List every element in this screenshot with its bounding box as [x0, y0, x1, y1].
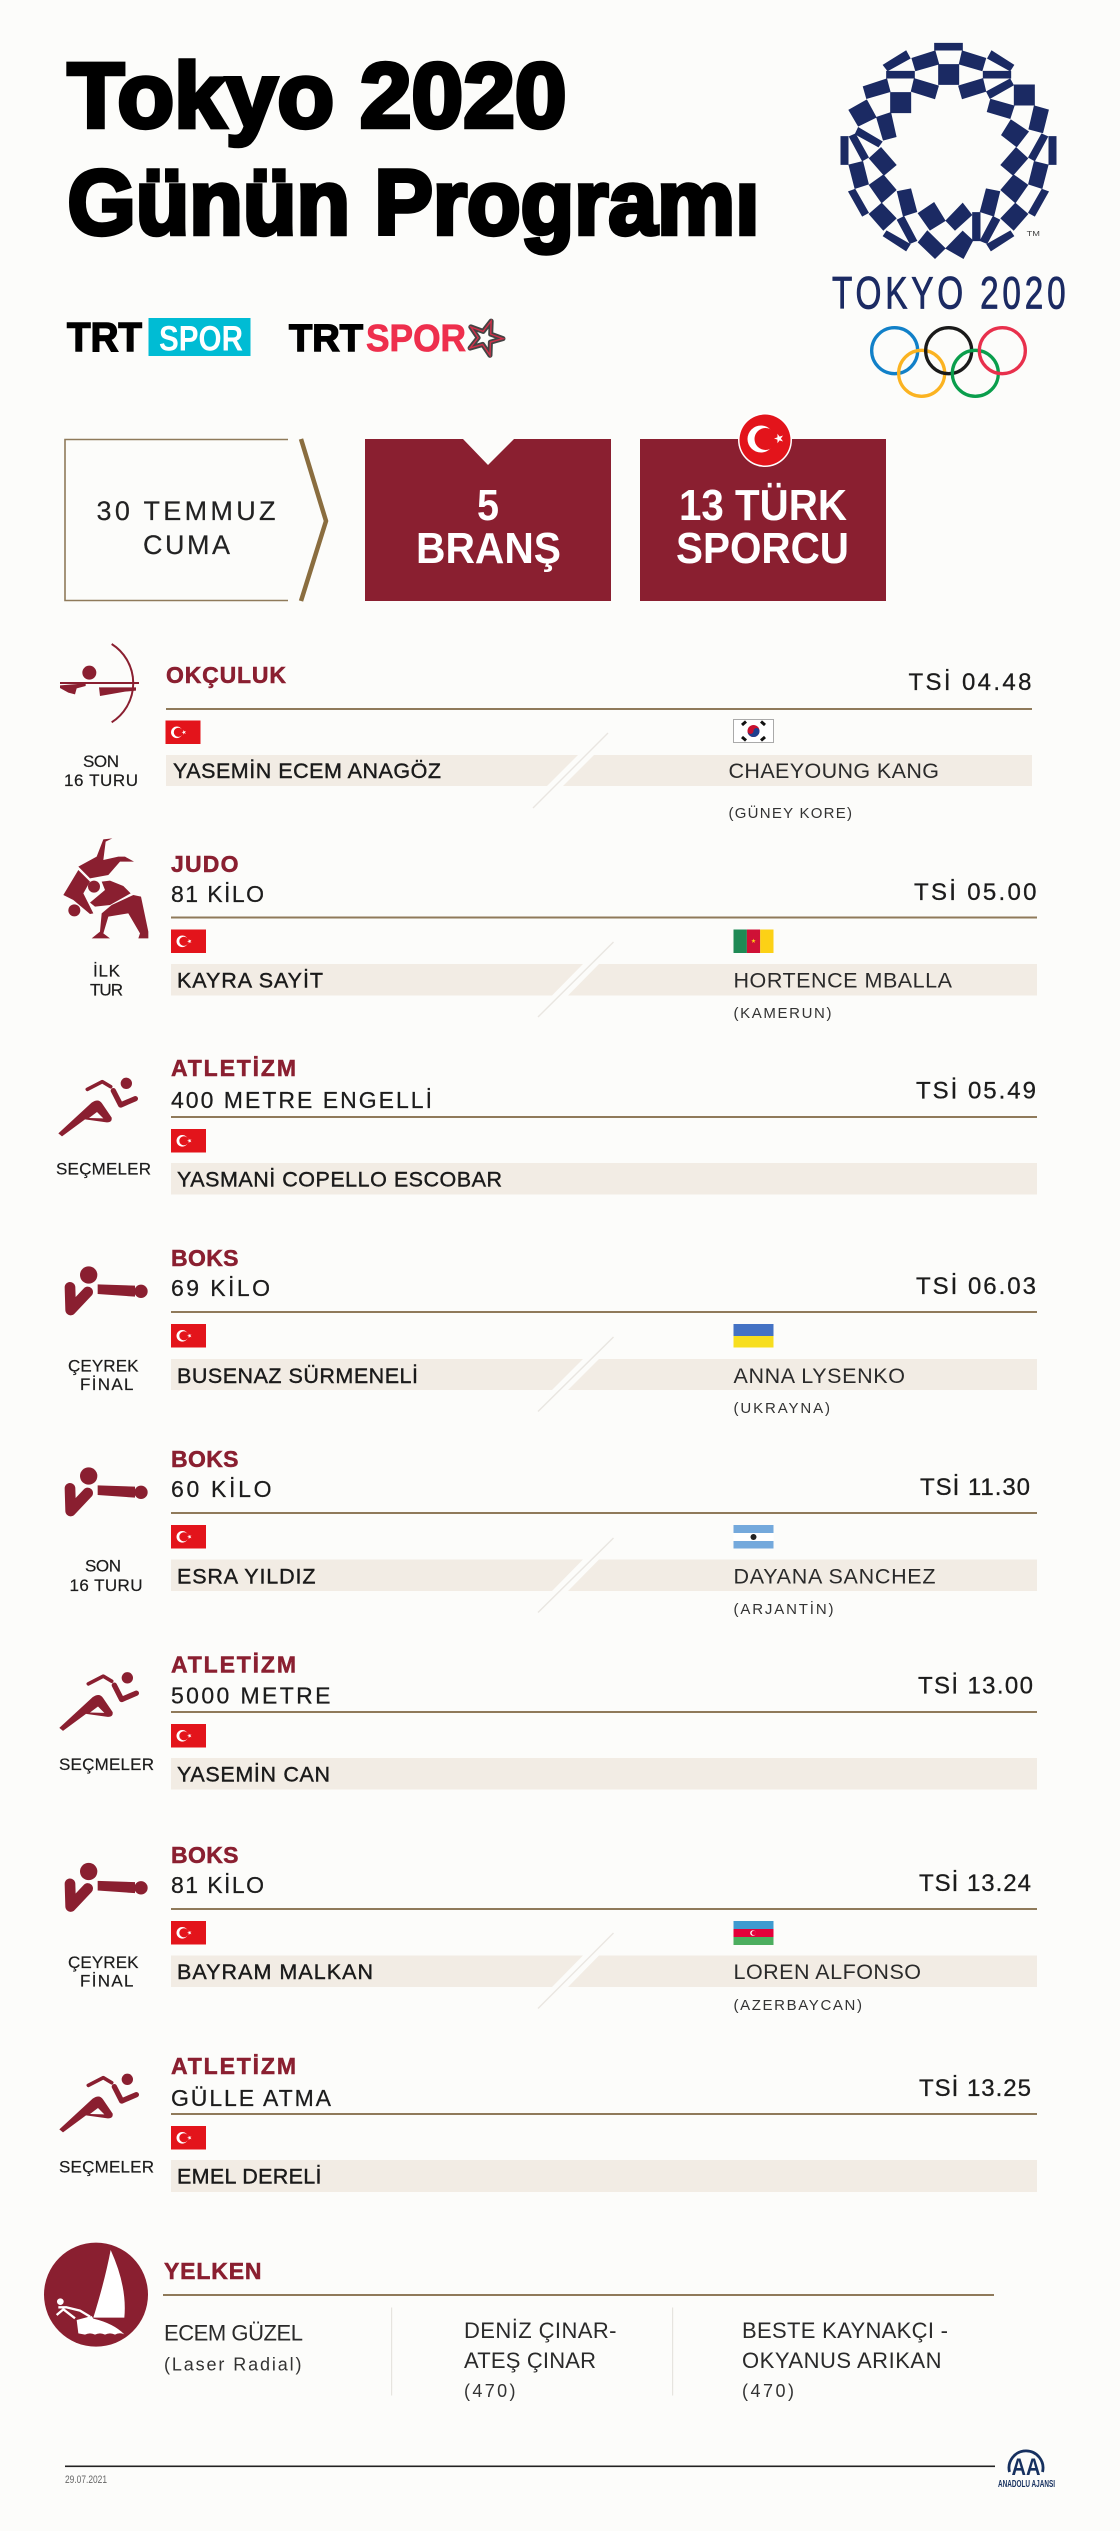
sailors: beste kaynakçı, okyanus arıkan [742, 2318, 948, 2401]
row: atletizm 400 metre engelli [56, 1055, 1037, 1194]
sailor: ecem güzel [164, 2320, 303, 2374]
row: boks 69 kilo: ANNA LYSENKO [734, 1364, 905, 1388]
icon: boxing [70, 1863, 148, 1906]
stage label: 16 TURU [64, 771, 138, 790]
sailors: deniz çınar, ateş çınar [464, 2318, 616, 2401]
date box: CUMA [143, 530, 230, 560]
row: boks 81 kilo: LOREN ALFONSO [734, 1960, 921, 1984]
stage label [68, 1356, 139, 1394]
stage label [90, 962, 123, 1000]
icon: archery [60, 644, 139, 722]
stage label [68, 1953, 139, 1990]
logo: TRT Spor Yıldız [289, 315, 507, 360]
row: atletizm 5000 metre: 5000 METRE [171, 1682, 330, 1708]
icon: argentina flag [734, 1525, 774, 1548]
row: atletizm 400 metre engelli: SEÇMELER [56, 1160, 151, 1178]
row: boks 69 kilo: (UKRAYNA) [734, 1400, 830, 1417]
row: okçuluk: TSİ 04.48 [908, 669, 1032, 696]
footer rule [65, 2466, 995, 2467]
stage label: TUR [90, 980, 123, 1000]
row: okçuluk: CHAEYOUNG KANG [728, 759, 939, 783]
row: okçuluk [60, 644, 1032, 822]
row: boks 81 kilo [68, 1842, 1037, 2014]
logo: anadolu ajansı [998, 2451, 1055, 2490]
stage label: FİNAL [80, 1375, 134, 1394]
row: atletizm 400 metre engelli: 400 METRE ENGELLİ [171, 1087, 432, 1113]
icon: running [59, 1672, 136, 1731]
row: boks 60 kilo: (ARJANTİN) [734, 1600, 834, 1618]
row: judo: TSİ 05.00 [914, 879, 1036, 906]
row: boks 60 kilo: TSİ 11.30 [920, 1474, 1030, 1501]
title: Günün Programı [68, 152, 760, 254]
row: atletizm gülle atma [59, 2053, 1037, 2192]
stat box: 5 branş: 5 [477, 481, 499, 530]
stage label: ÇEYREK [68, 1356, 139, 1376]
row: judo: (KAMERUN) [734, 1005, 832, 1022]
checkered wreath [841, 43, 1056, 258]
row: boks 81 kilo: 81 KİLO [171, 1872, 264, 1898]
icon: cameroon flag [734, 930, 774, 953]
row: okçuluk: OKÇULUK [166, 662, 286, 688]
icon: ukraine flag [734, 1324, 774, 1348]
row: boks 69 kilo: BUSENAZ SÜRMENELİ [177, 1364, 418, 1388]
section: yelken: YELKEN [164, 2258, 262, 2284]
row: okçuluk: (GÜNEY KORE) [728, 804, 852, 822]
stat box: 13 Türk sporcu: 13 TÜRK [679, 481, 847, 530]
row: atletizm gülle atma: TSİ 13.25 [919, 2075, 1031, 2102]
title [68, 45, 760, 254]
icon: azerbaijan flag [734, 1921, 774, 1945]
row: okçuluk: YASEMİN ECEM ANAGÖZ [173, 759, 441, 783]
stat box: 5 branş: BRANŞ [416, 524, 561, 573]
row: atletizm 400 metre engelli: ATLETİZM [171, 1055, 296, 1081]
icon: boxing [70, 1467, 148, 1511]
section: yelken [44, 2243, 994, 2401]
icon: korea flag [734, 720, 774, 742]
icon: judo [63, 838, 148, 938]
icon: running [58, 1078, 135, 1136]
icon: boxing [70, 1266, 148, 1310]
date box [65, 439, 326, 601]
title: Tokyo 2020 [68, 45, 566, 147]
sailors: deniz çınar, ateş çınar: ATEŞ ÇINAR [464, 2348, 596, 2373]
logo: Tokyo 2020 emblem: TM [1027, 229, 1040, 238]
emblem wordmark: TOKYO 2020 [832, 269, 1066, 319]
row: atletizm gülle atma: GÜLLE ATMA [171, 2085, 332, 2111]
row: atletizm gülle atma: EMEL DERELİ [177, 2164, 322, 2188]
row: boks 60 kilo: 60 KİLO [171, 1476, 272, 1502]
logo: TRT Spor: TRT [67, 314, 142, 360]
sailor: ecem güzel: ECEM GÜZEL [164, 2320, 303, 2346]
row: judo: HORTENCE MBALLA [734, 968, 953, 992]
stage label: FİNAL [80, 1972, 134, 1990]
stat box: 13 Türk sporcu: SPORCU [676, 524, 849, 573]
logo: TRT Spor Yıldız: TRT [289, 318, 363, 360]
row: boks 60 kilo: ESRA YILDIZ [177, 1564, 316, 1588]
row: atletizm gülle atma: SEÇMELER [59, 2158, 154, 2176]
sailors: beste kaynakçı, okyanus arıkan: (470) [742, 2381, 794, 2401]
row: boks 69 kilo: TSİ 06.03 [916, 1273, 1036, 1300]
row: boks 81 kilo: BAYRAM MALKAN [177, 1960, 373, 1984]
row: boks 81 kilo: (AZERBAYCAN) [734, 1997, 862, 2014]
row: atletizm 5000 metre: ATLETİZM [171, 1652, 296, 1678]
logo: Tokyo 2020 emblem [832, 43, 1066, 396]
row: atletizm 5000 metre: SEÇMELER [59, 1755, 154, 1774]
stage label [64, 752, 138, 790]
sailor: ecem güzel: (Laser Radial) [164, 2354, 302, 2374]
sailors: beste kaynakçı, okyanus arıkan: OKYANUS ARIKAN [742, 2348, 942, 2373]
row: atletizm 5000 metre: TSİ 13.00 [918, 1672, 1033, 1700]
row: atletizm 5000 metre [59, 1652, 1037, 1790]
stage label: ÇEYREK [68, 1953, 139, 1972]
row: judo: 81 KİLO [171, 881, 264, 907]
stage label: SON [83, 752, 119, 771]
row: boks 81 kilo: BOKS [171, 1842, 238, 1868]
stage label: SON [85, 1556, 121, 1576]
row: boks 69 kilo [68, 1245, 1037, 1417]
row: judo: JUDO [171, 851, 238, 877]
row: boks 60 kilo: BOKS [171, 1446, 238, 1472]
logo: anadolu ajansı: AA [1012, 2454, 1040, 2481]
logo: TRT Spor [67, 314, 250, 360]
date box: 30 TEMMUZ [96, 496, 276, 526]
row: judo [63, 838, 1037, 1022]
stage label [70, 1556, 142, 1595]
logo: anadolu ajansı: ANADOLU AJANSI [998, 2479, 1055, 2490]
olympic rings [872, 328, 1025, 396]
row: boks 60 kilo [70, 1446, 1037, 1618]
row: boks 81 kilo: TSİ 13.24 [919, 1870, 1031, 1897]
row: atletizm gülle atma: ATLETİZM [171, 2053, 296, 2079]
sailors: beste kaynakçı, okyanus arıkan: BESTE KAYNAKÇI - [742, 2318, 948, 2343]
sailors: deniz çınar, ateş çınar: (470) [464, 2381, 516, 2401]
logo: TRT Spor: SPOR [159, 320, 243, 358]
icon: running [59, 2074, 136, 2132]
row: judo: KAYRA SAYİT [177, 968, 323, 992]
row: atletizm 400 metre engelli: TSİ 05.49 [916, 1078, 1036, 1104]
stat box: 5 branş [365, 439, 611, 601]
sailors: deniz çınar, ateş çınar: DENİZ ÇINAR- [464, 2318, 616, 2343]
stage label: İLK [93, 962, 121, 980]
row: boks 69 kilo: BOKS [171, 1245, 238, 1271]
stage label: 16 TURU [70, 1576, 142, 1595]
icon: turkish flag badge [738, 413, 792, 467]
logo: TRT Spor Yıldız: SPOR [366, 318, 466, 360]
stat box: 13 Türk sporcu [640, 413, 886, 601]
date stamp: 29.07.2021 [65, 2474, 107, 2486]
row: boks 69 kilo: 69 KİLO [171, 1275, 270, 1301]
icon: sailing [44, 2243, 148, 2347]
row: atletizm 5000 metre: YASEMİN CAN [177, 1762, 330, 1786]
row: boks 60 kilo: DAYANA SANCHEZ [734, 1564, 936, 1588]
row: atletizm 400 metre engelli: YASMANİ COPELLO ESCOBAR [177, 1168, 502, 1192]
